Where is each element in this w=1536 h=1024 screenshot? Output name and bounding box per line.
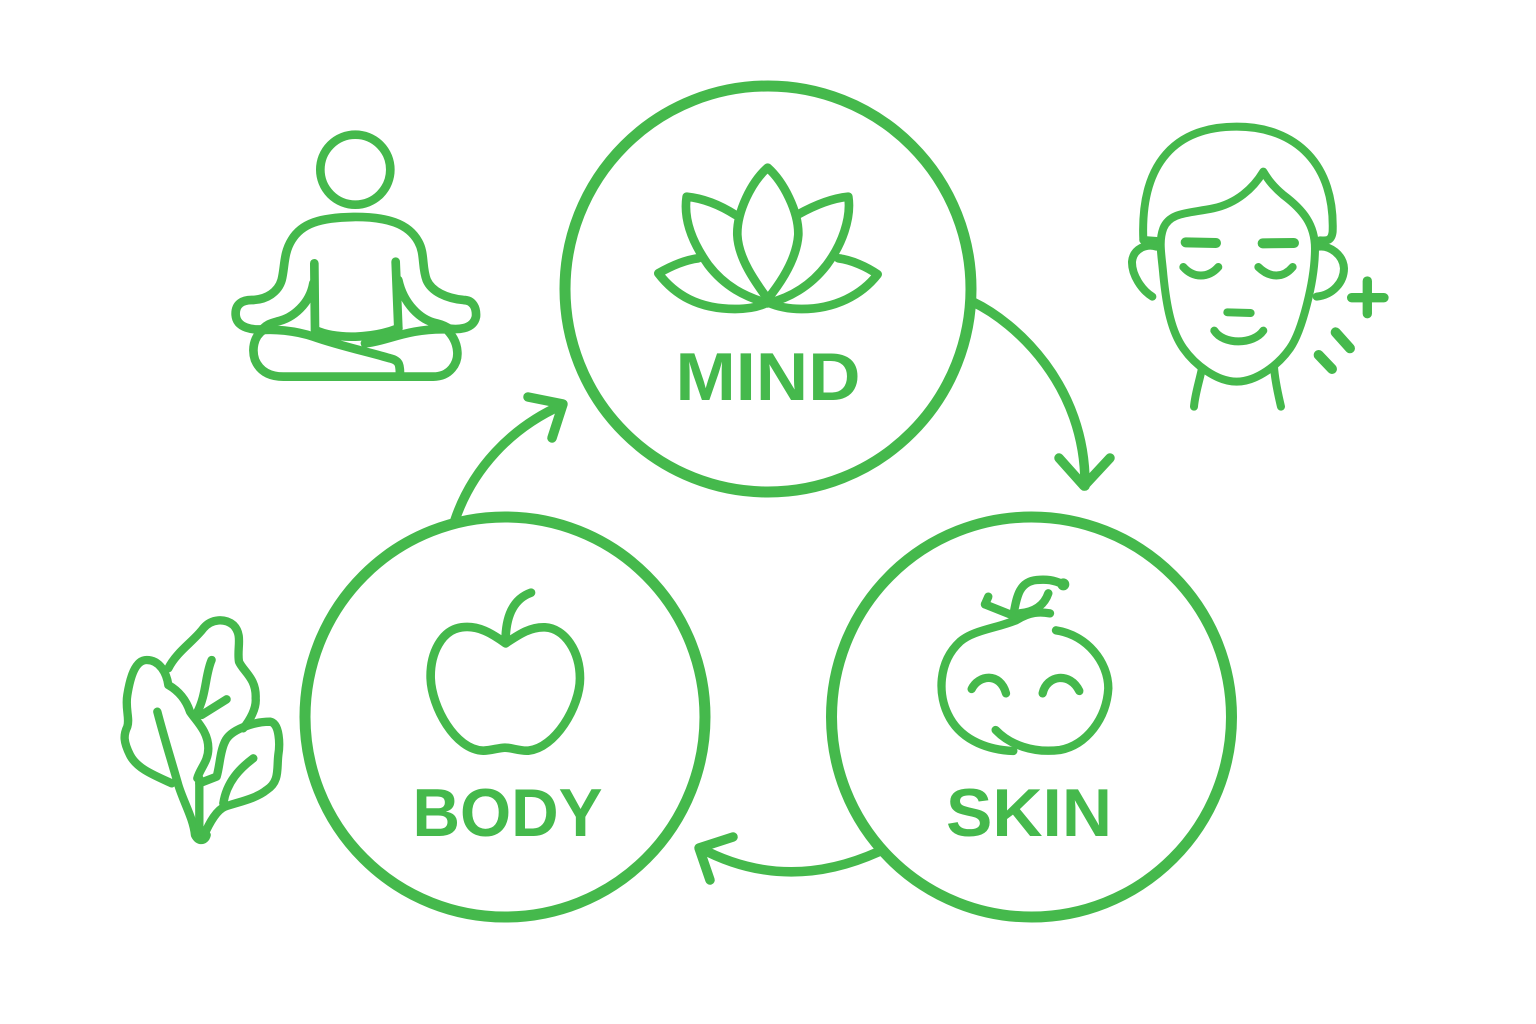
panel: skin circle <box>832 517 1232 917</box>
icon: smiling face with sprout <box>942 580 1108 751</box>
panel: mind circle <box>565 86 971 492</box>
icon: leafy greens <box>125 620 279 840</box>
icon: meditating person <box>236 135 476 377</box>
icon: lotus <box>658 168 878 309</box>
label: mind: MIND <box>676 339 860 415</box>
label: body: BODY <box>412 775 602 851</box>
icon: apple <box>431 593 580 751</box>
arrow: body to mind <box>455 397 563 520</box>
panel: body circle <box>305 517 705 917</box>
arrow: mind to skin <box>973 302 1110 486</box>
label: skin: SKIN <box>946 775 1112 851</box>
icon: calm face <box>1132 127 1384 407</box>
arrow: skin to body <box>699 837 878 880</box>
